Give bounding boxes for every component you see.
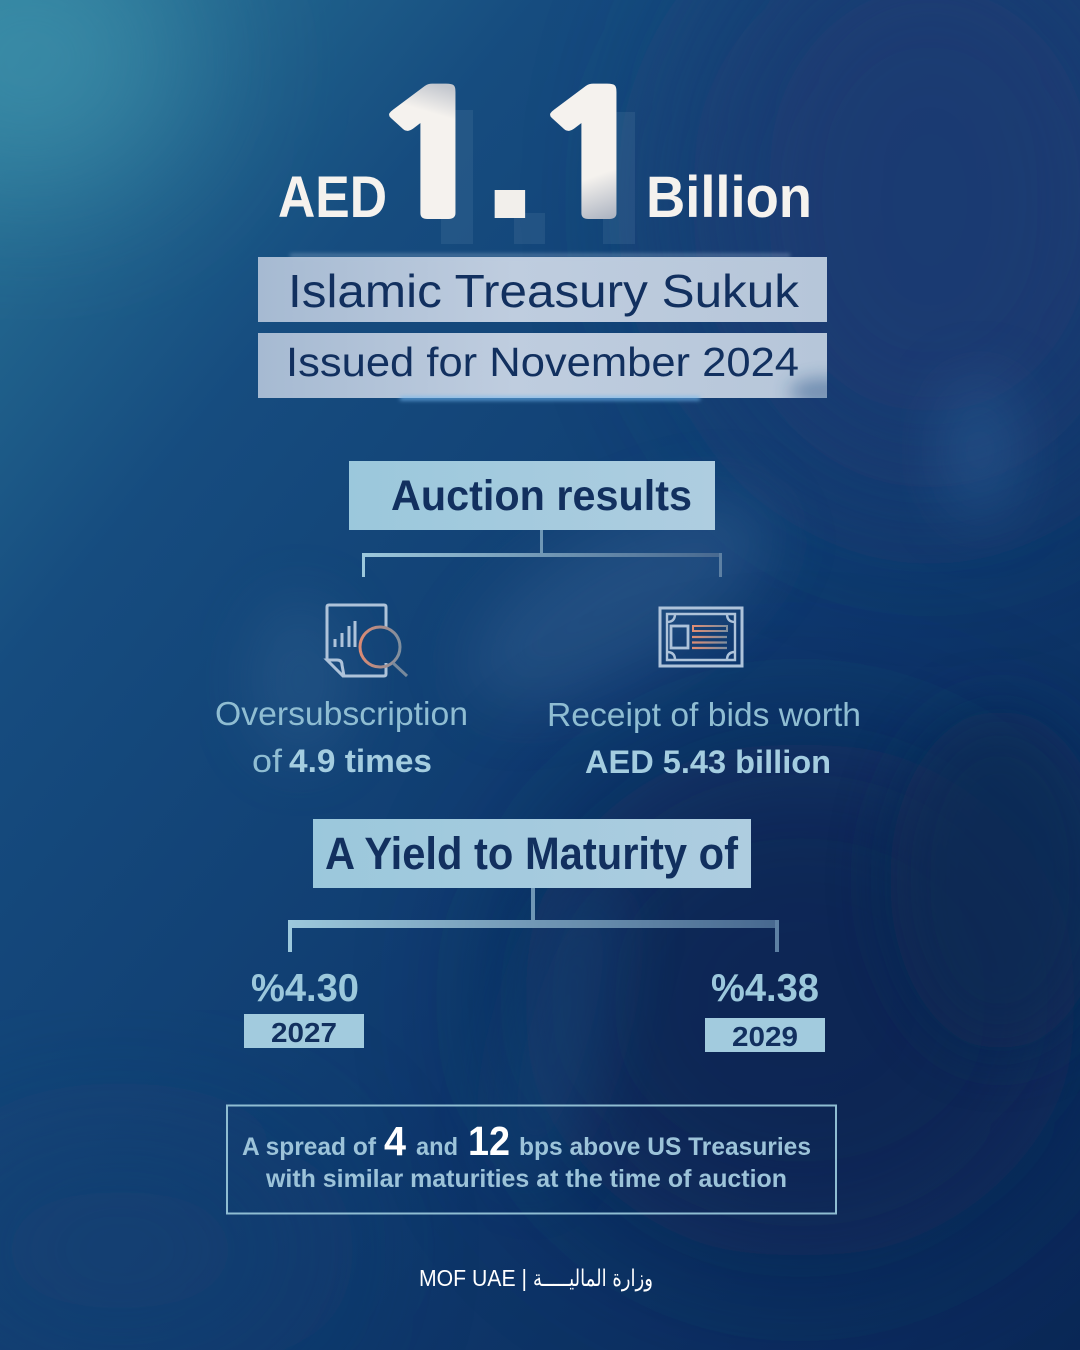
heading: A Yield to Maturity of — [313, 819, 751, 888]
headline: AED 1.1 Billion: 1 — [531, 73, 658, 241]
heading: Auction results: Auction results — [391, 472, 692, 520]
footer: ministry name — [419, 1265, 653, 1292]
text: oversubscription — [215, 695, 468, 779]
headline: AED 1.1 Billion: AED — [278, 165, 387, 230]
banner: Islamic Treasury Sukuk — [258, 254, 827, 322]
headline: AED 1.1 Billion: . — [480, 48, 540, 258]
banner: Issued for November 2024: Issued for November 2024 — [286, 339, 799, 385]
callout: spread: bps above US Treasuries — [519, 1133, 811, 1161]
connector: yield — [288, 888, 779, 952]
text: receipt of bids: AED 5.43 billion — [585, 744, 831, 780]
yield: 2027 — [244, 967, 364, 1048]
callout: spread: 4 — [384, 1118, 406, 1164]
text: receipt of bids — [547, 696, 861, 780]
connector: auction results — [362, 530, 722, 577]
callout: spread: A spread of — [242, 1133, 377, 1161]
headline: AED 1.1 Billion — [278, 48, 812, 258]
yield: 2027: 2027 — [271, 1017, 337, 1048]
icon: report with magnifier — [327, 605, 407, 676]
yield: 2029: %4.38 — [711, 967, 819, 1010]
text: oversubscription: of — [252, 743, 282, 779]
headline: AED 1.1 Billion: 1 — [370, 73, 497, 241]
callout: spread — [227, 1106, 836, 1214]
callout: spread: with similar maturities at the time of auction — [265, 1165, 787, 1193]
callout: spread: 12 — [468, 1118, 510, 1164]
callout: spread: and — [416, 1133, 458, 1161]
headline: AED 1.1 Billion: Billion — [646, 165, 812, 230]
text: oversubscription: 4.9 times — [289, 743, 432, 779]
ghost bars behind headline — [441, 110, 635, 244]
banner: Islamic Treasury Sukuk: Islamic Treasury Sukuk — [288, 265, 800, 317]
yield: 2029 — [705, 967, 825, 1052]
heading: A Yield to Maturity of: A Yield to Maturity of — [325, 828, 739, 879]
footer: ministry name: وزارة الماليـــــة — [533, 1266, 653, 1292]
yield: 2029: 2029 — [732, 1021, 798, 1052]
banner: Issued for November 2024 — [258, 333, 861, 406]
yield: 2027: %4.30 — [251, 967, 359, 1010]
text: receipt of bids: Receipt of bids worth — [547, 696, 861, 733]
heading: Auction results — [349, 461, 715, 530]
footer: ministry name: MOF UAE | — [419, 1265, 527, 1291]
icon: certificate — [660, 608, 742, 666]
text: oversubscription: Oversubscription — [215, 695, 468, 732]
